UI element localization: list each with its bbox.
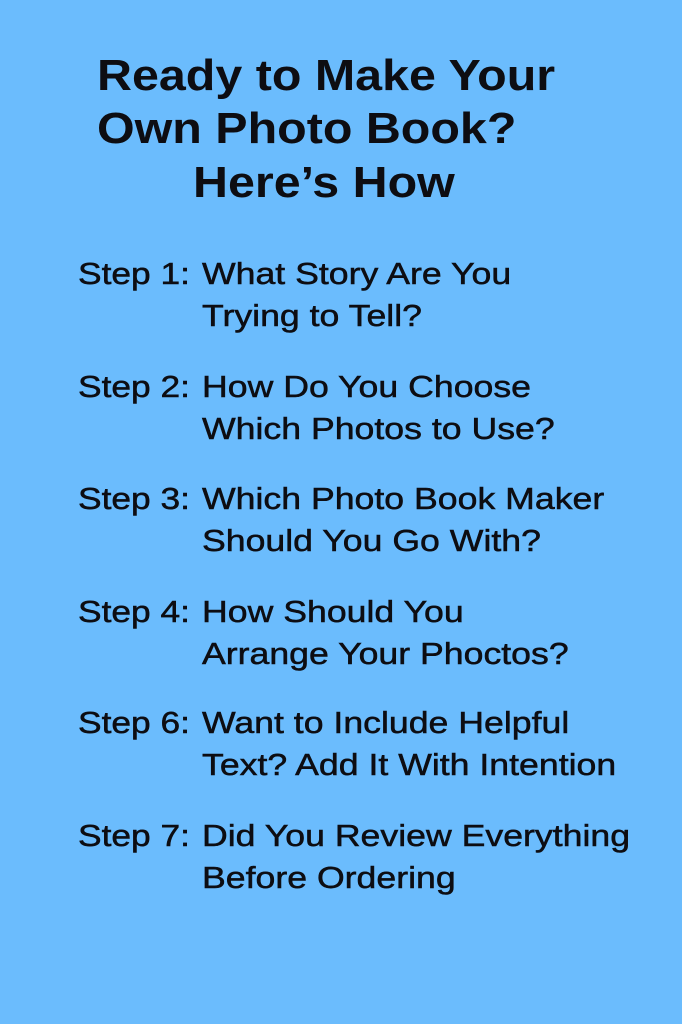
step 6: Step 6: <box>78 705 190 740</box>
step 6: Text? Add It With Intention <box>202 747 616 782</box>
title: Here’s How <box>193 158 455 207</box>
step 4: Step 4: <box>78 594 190 629</box>
step 2: Which Photos to Use? <box>202 411 555 446</box>
title: Ready to Make Your <box>97 51 555 100</box>
step 7 <box>78 818 630 895</box>
step 2 <box>78 369 555 446</box>
step 3: Should You Go With? <box>202 523 541 558</box>
step 7: Step 7: <box>78 818 190 853</box>
title: Own Photo Book? <box>97 104 516 153</box>
step 1: Trying to Tell? <box>202 298 422 333</box>
step 2: Step 2: <box>78 369 190 404</box>
step 1 <box>78 256 511 333</box>
step 3: Which Photo Book Maker <box>202 481 604 516</box>
step 4 <box>78 594 569 671</box>
step 6: Want to Include Helpful <box>202 705 569 740</box>
step 4: How Should You <box>202 594 464 629</box>
step 3 <box>78 481 604 558</box>
title <box>97 51 555 207</box>
step 1: What Story Are You <box>202 256 511 291</box>
step 7: Did You Review Everything <box>202 818 630 853</box>
step 3: Step 3: <box>78 481 190 516</box>
step 6 <box>78 705 616 782</box>
step 1: Step 1: <box>78 256 190 291</box>
step 4: Arrange Your Phoctos? <box>202 636 569 671</box>
step 2: How Do You Choose <box>202 369 531 404</box>
step 7: Before Ordering <box>202 860 456 895</box>
